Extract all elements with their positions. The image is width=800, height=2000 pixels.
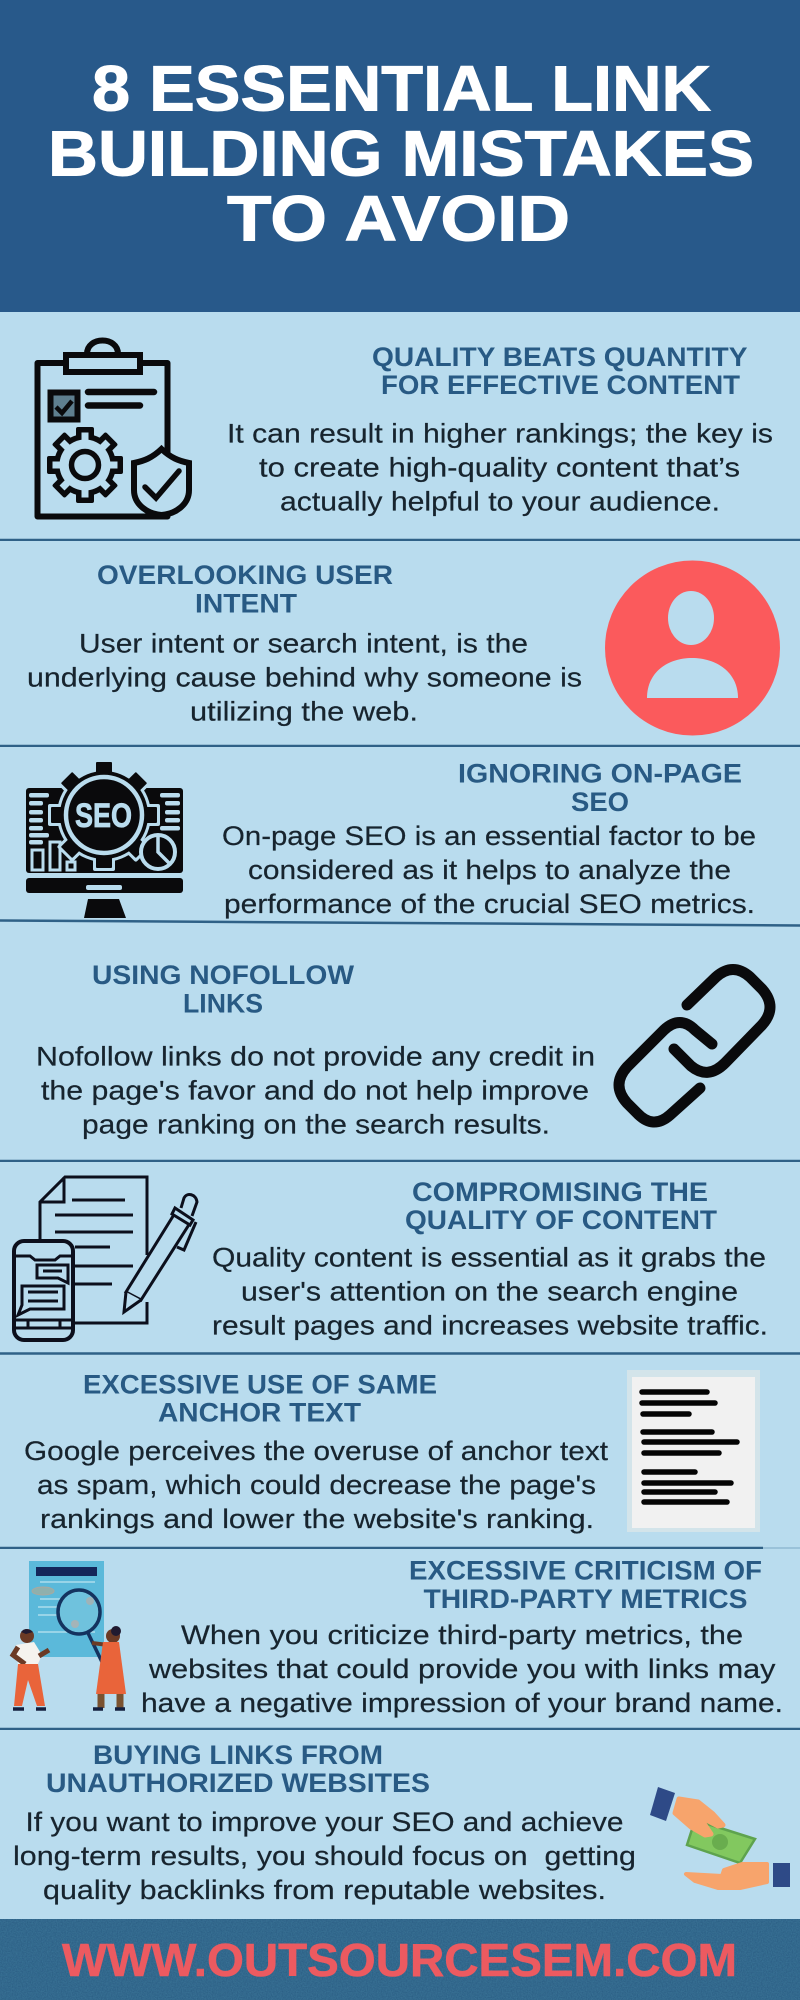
body text [212, 1242, 768, 1340]
body text: quality backlinks from reputable websites. [43, 1875, 606, 1905]
icon: chain link [619, 970, 770, 1122]
body text [222, 821, 756, 919]
body text: result pages and increases website traffic. [212, 1310, 768, 1340]
footer banner [0, 1919, 800, 2000]
heading: EXCESSIVE CRITICISM OF [409, 1556, 762, 1586]
panel: compromising the quality of content [0, 1162, 800, 1353]
body text: On-page SEO is an essential factor to be [222, 821, 756, 851]
panel: ignoring on-page SEO [0, 747, 800, 921]
body text: If you want to improve your SEO and achieve [26, 1807, 624, 1837]
heading [83, 1370, 437, 1428]
heading: OVERLOOKING USER [97, 560, 393, 590]
title: TO AVOID [227, 182, 570, 254]
icon: text document [627, 1370, 760, 1532]
body text [227, 419, 773, 517]
heading [46, 1740, 430, 1798]
body text: page ranking on the search results. [82, 1110, 550, 1140]
heading: IGNORING ON-PAGE [458, 759, 742, 789]
heading: BUYING LINKS FROM [93, 1740, 383, 1770]
body text: as spam, which could decrease the page's [37, 1470, 596, 1500]
heading [372, 342, 748, 400]
body text: utilizing the web. [190, 697, 418, 727]
body text [27, 629, 582, 727]
body text: to create high-quality content that’s [259, 453, 740, 483]
body text [13, 1807, 636, 1905]
body text: It can result in higher rankings; the key is [227, 419, 773, 449]
heading: THIRD-PARTY METRICS [424, 1584, 748, 1614]
heading: EXCESSIVE USE OF SAME [83, 1370, 437, 1400]
heading: LINKS [183, 989, 263, 1019]
heading: USING NOFOLLOW [92, 960, 355, 990]
heading [409, 1556, 762, 1614]
body text: websites that could provide you with links may [148, 1654, 776, 1684]
icon: user avatar [605, 560, 780, 736]
heading [405, 1177, 718, 1235]
title [48, 52, 754, 254]
panel: buying links from unauthorized websites [0, 1730, 800, 1919]
icon: SEO monitor: SEO [75, 797, 132, 835]
heading: QUALITY BEATS QUANTITY [372, 342, 748, 372]
title: 8 ESSENTIAL LINK [92, 52, 711, 124]
body text: When you criticize third-party metrics, the [181, 1620, 743, 1650]
body text: the page's favor and do not help improve [41, 1076, 589, 1106]
heading [97, 560, 393, 619]
panel: using nofollow links [0, 927, 800, 1161]
heading: SEO [571, 787, 629, 817]
icon: SEO monitor [26, 759, 183, 918]
panel: excessive use of same anchor text [0, 1355, 800, 1547]
illustration: people inspecting a report [13, 1561, 126, 1709]
body text: rankings and lower the website's ranking. [40, 1504, 594, 1534]
icon: document, phone and pen [14, 1177, 197, 1340]
body text [141, 1620, 783, 1718]
icon: hands exchanging money [650, 1787, 790, 1888]
body text: performance of the crucial SEO metrics. [224, 889, 755, 919]
panel: excessive criticism of third-party metrics [0, 1549, 800, 1729]
heading: INTENT [195, 589, 298, 619]
body text: have a negative impression of your brand name. [141, 1688, 783, 1718]
body text: underlying cause behind why someone is [27, 663, 582, 693]
website url: WWW.OUTSOURCESEM.COM [62, 1934, 737, 1986]
body text: Quality content is essential as it grabs the [212, 1242, 766, 1272]
heading [458, 759, 742, 817]
body text: actually helpful to your audience. [280, 487, 720, 517]
body text: Nofollow links do not provide any credit in [36, 1042, 595, 1072]
body text: Google perceives the overuse of anchor text [24, 1436, 609, 1466]
header banner [0, 0, 800, 312]
body text: long-term results, you should focus on getting [13, 1841, 636, 1871]
panel: overlooking user intent [0, 541, 800, 746]
panel: quality beats quantity [0, 312, 800, 540]
body text: considered as it helps to analyze the [248, 855, 731, 885]
body text: user's attention on the search engine [241, 1276, 738, 1306]
heading: FOR EFFECTIVE CONTENT [381, 370, 741, 400]
body text: User intent or search intent, is the [79, 629, 528, 659]
body text [24, 1436, 609, 1534]
heading [92, 960, 355, 1019]
heading: ANCHOR TEXT [158, 1398, 362, 1428]
icon: clipboard with gear and shield [38, 340, 189, 516]
heading: QUALITY OF CONTENT [405, 1205, 718, 1235]
title: BUILDING MISTAKES [48, 118, 754, 190]
heading: COMPROMISING THE [412, 1177, 708, 1207]
body text [36, 1042, 595, 1140]
heading: UNAUTHORIZED WEBSITES [46, 1768, 430, 1798]
